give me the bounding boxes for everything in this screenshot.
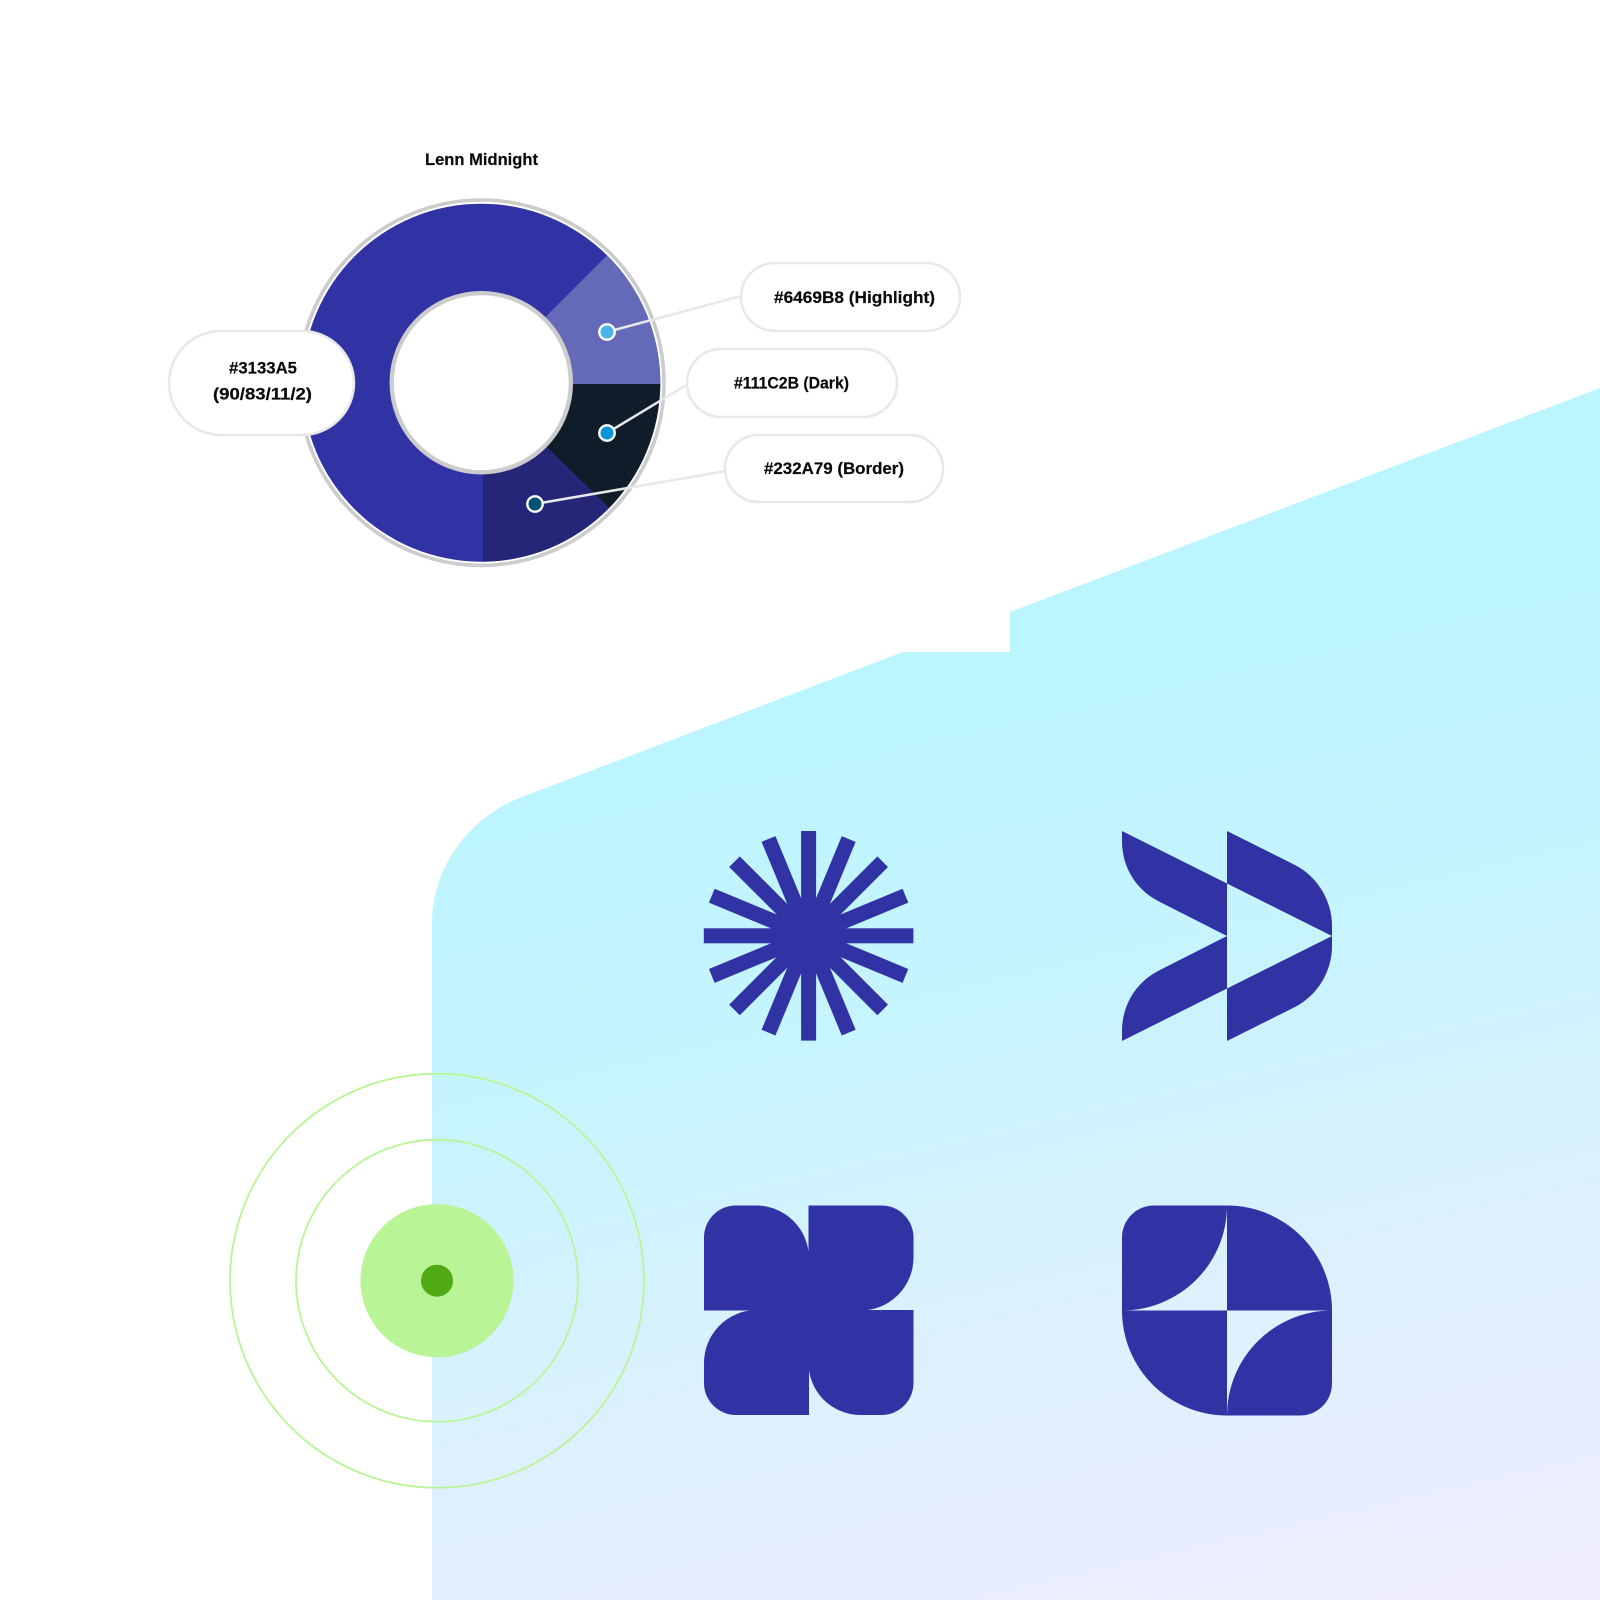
outer ring — [230, 1074, 644, 1488]
segment: border #232A79 — [483, 447, 609, 562]
callout: #232A79 border: #232A79 (Border) — [764, 460, 904, 478]
leader line: dark — [607, 384, 688, 433]
chart title: Lenn Midnight — [425, 151, 538, 169]
callout: #3133A5: (90/83/11/2) — [213, 386, 312, 404]
middle ring — [296, 1140, 578, 1422]
callout: #3133A5: #3133A5 — [229, 360, 297, 378]
leader line: border — [535, 471, 726, 504]
segment: dark #111C2B — [547, 384, 660, 508]
marker: dark — [599, 425, 615, 441]
donut chart: Lenn Midnight — [304, 198, 666, 568]
icon: clover — [704, 1206, 914, 1415]
target: concentric green circles — [230, 1074, 644, 1488]
inner ring and hole — [392, 293, 571, 472]
icon: four-point star tile — [1122, 1206, 1332, 1416]
background: gradient stepped shape — [432, 388, 1600, 1600]
icon: starburst — [704, 831, 913, 1041]
icon: double chevron — [1122, 831, 1332, 1041]
callout: #111C2B dark: #111C2B (Dark) — [734, 374, 849, 392]
outer ring — [299, 200, 664, 565]
callout: #232A79 border — [725, 435, 943, 502]
marker: border — [527, 496, 543, 512]
center dot — [421, 1265, 453, 1297]
segment: main #3133A5 — [302, 204, 660, 562]
callout: #3133A5 — [169, 331, 354, 435]
callout: #6469B8 highlight: #6469B8 (Highlight) — [774, 289, 935, 307]
marker: highlight — [599, 324, 615, 340]
solid disc — [360, 1204, 514, 1357]
leader line: highlight — [607, 296, 741, 332]
segment: highlight #6469B8 — [546, 255, 660, 384]
callout: #111C2B dark — [687, 349, 897, 417]
callout: #6469B8 highlight — [741, 263, 960, 331]
